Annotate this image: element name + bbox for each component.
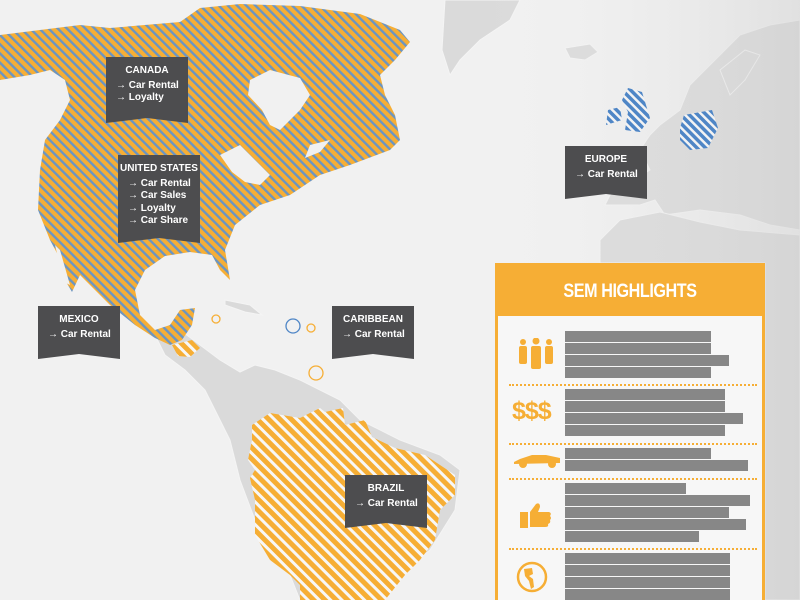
central & south america xyxy=(155,330,460,600)
banner: brazil: → Car Rental xyxy=(355,498,418,508)
banner: mexico xyxy=(38,306,120,359)
icon: globe xyxy=(516,562,548,592)
banner: us: UNITED STATES xyxy=(120,163,198,174)
banner: us: → Car Rental xyxy=(128,178,191,188)
banner: brazil: BRAZIL xyxy=(368,483,404,494)
europe highlights xyxy=(622,88,650,132)
banner: us: → Loyalty xyxy=(128,202,176,214)
banner: canada: → Car Rental xyxy=(116,80,179,90)
banner: us xyxy=(118,155,200,243)
banner: europe xyxy=(565,146,647,199)
banner: caribbean xyxy=(332,306,414,359)
heading: SEM HIGHLIGHTS xyxy=(563,281,697,302)
banner: caribbean: → Car Rental xyxy=(342,328,405,340)
banner: us: → Car Sales xyxy=(128,190,186,201)
africa xyxy=(600,212,800,600)
banner: mexico: → Car Rental xyxy=(48,328,111,340)
panel: SEM highlights xyxy=(495,263,765,600)
hudson bay & lakes (ocean) xyxy=(55,70,330,285)
iceland xyxy=(565,44,598,60)
cuba xyxy=(225,300,262,315)
banner: brazil xyxy=(345,475,427,528)
banner: mexico: MEXICO xyxy=(59,314,99,325)
icon: car xyxy=(514,455,560,468)
banner: canada: CANADA xyxy=(125,65,169,76)
europe xyxy=(605,20,800,230)
banner: europe: → Car Rental xyxy=(575,168,638,180)
banner: canada xyxy=(106,57,188,123)
central america xyxy=(172,340,200,357)
icon: thumbs up xyxy=(520,503,551,528)
icon: dollars: $$$ xyxy=(512,397,551,425)
caribbean icons xyxy=(212,315,323,380)
banner: canada: → Loyalty xyxy=(116,92,164,103)
icon: people xyxy=(519,338,553,369)
greenland xyxy=(442,0,520,75)
brazil xyxy=(248,408,455,600)
banner: europe: EUROPE xyxy=(585,154,627,165)
banner: caribbean: CARIBBEAN xyxy=(343,314,403,325)
banner: us: → Car Share xyxy=(128,215,188,226)
north america striped xyxy=(0,4,410,345)
